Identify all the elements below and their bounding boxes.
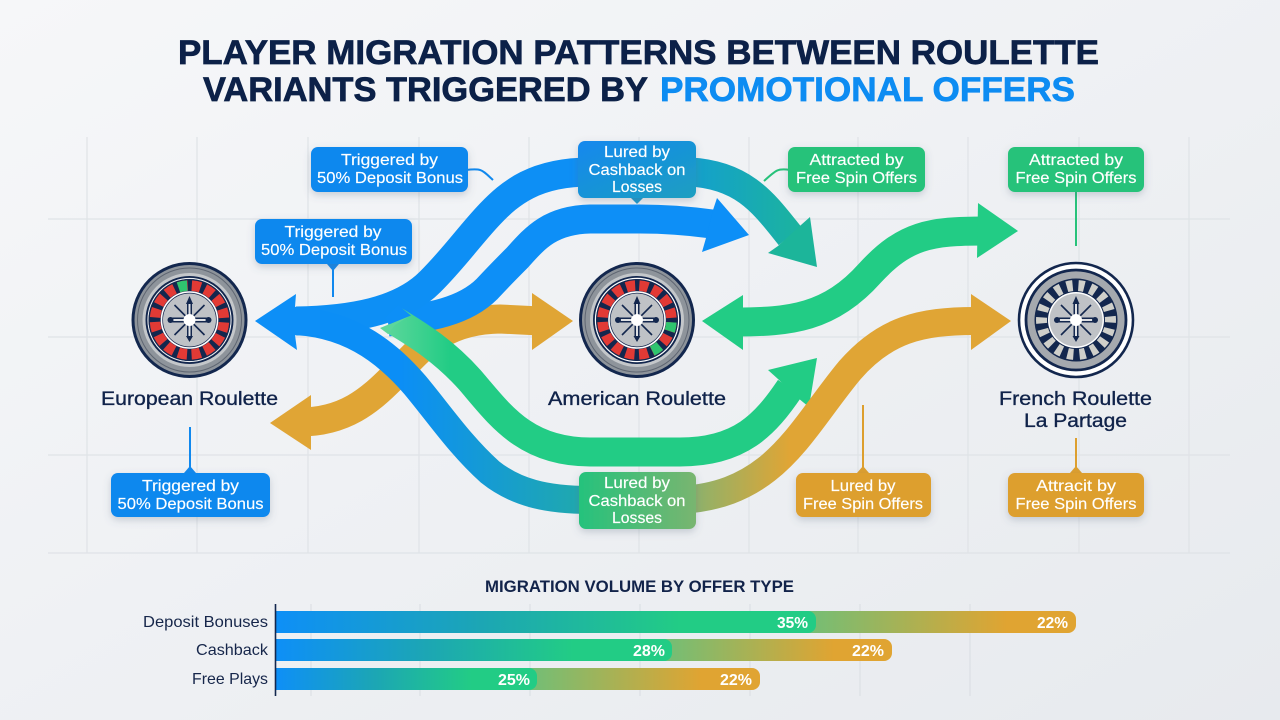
callout: lured free spin: Lured by bbox=[830, 478, 896, 495]
callout: deposit bonus near European: Triggered by bbox=[284, 224, 382, 241]
callout: lured free spin: Free Spin Offers bbox=[803, 496, 923, 513]
callout: free spin top middle: Attracted by bbox=[810, 152, 904, 169]
callout: deposit bonus near European: 50% Deposit Bonus bbox=[261, 242, 407, 259]
label: French Roulette La Partage: La Partage bbox=[1024, 410, 1127, 432]
arrow: green lower from European to French bbox=[380, 305, 817, 452]
callout: deposit bonus near European bbox=[255, 219, 412, 297]
bar: Deposit Bonuses: 35% bbox=[777, 615, 808, 632]
label: French Roulette La Partage bbox=[999, 388, 1152, 432]
callout: deposit bonus top: 50% Deposit Bonus bbox=[317, 170, 463, 187]
callout: free spin top right: Free Spin Offers bbox=[1016, 170, 1136, 187]
title: VARIANTS TRIGGERED BY bbox=[203, 71, 648, 109]
callout: deposit bonus bottom left bbox=[111, 427, 270, 517]
label: European Roulette: European Roulette bbox=[101, 388, 278, 410]
bar: Deposit Bonuses: Deposit Bonuses bbox=[143, 614, 268, 631]
bar: Free Plays: 22% bbox=[720, 672, 752, 689]
callout: cashback bottom bbox=[579, 472, 696, 529]
callout: cashback top: Lured by bbox=[604, 144, 670, 161]
callout: free spin top middle: Free Spin Offers bbox=[796, 170, 917, 187]
arrow: blue-teal from European over American to French bbox=[296, 172, 817, 321]
wheel: French Roulette bbox=[1019, 263, 1133, 377]
title: PROMOTIONAL OFFERS bbox=[660, 71, 1075, 109]
arrow: gold two-way between European and American bbox=[270, 293, 573, 450]
callout: deposit bonus top: Triggered by bbox=[341, 152, 438, 169]
arrow: European Roulette head bbox=[255, 294, 320, 350]
title: PLAYER MIGRATION PATTERNS BETWEEN ROULETTE bbox=[178, 34, 1099, 72]
callout: attracit free spin: Free Spin Offers bbox=[1016, 496, 1136, 513]
bar: Cashback bbox=[196, 639, 892, 661]
arrow: green from French to American bbox=[702, 203, 1018, 350]
callout: cashback bottom: Lured by bbox=[604, 475, 670, 492]
callout: deposit bonus top bbox=[311, 147, 493, 192]
bar: Cashback: 22% bbox=[852, 643, 884, 660]
callout: free spin top right bbox=[1008, 147, 1144, 246]
chart heading: MIGRATION VOLUME BY OFFER TYPE bbox=[485, 578, 794, 596]
callout: cashback top bbox=[578, 141, 696, 204]
callout: attracit free spin bbox=[1008, 438, 1144, 517]
arrow: blue to gold lower flow bbox=[285, 294, 1011, 500]
callout: cashback top: Losses bbox=[612, 179, 662, 196]
callout: cashback bottom: Cashback on bbox=[588, 493, 686, 510]
callout: free spin top middle bbox=[764, 147, 925, 192]
bar: Deposit Bonuses bbox=[143, 611, 1076, 633]
callout: attracit free spin: Attracit by bbox=[1036, 478, 1116, 495]
bar: Deposit Bonuses: 22% bbox=[1037, 615, 1068, 632]
bar: Cashback: Cashback bbox=[196, 642, 269, 659]
bar: Free Plays bbox=[192, 668, 760, 690]
wheel: European Roulette bbox=[133, 264, 246, 376]
label: French Roulette La Partage: French Roulette bbox=[999, 388, 1152, 410]
callout: lured free spin bbox=[796, 405, 931, 517]
bar: Free Plays: 25% bbox=[498, 672, 530, 689]
label: American Roulette: American Roulette bbox=[548, 388, 726, 410]
callout: cashback bottom: Losses bbox=[612, 510, 662, 527]
title bbox=[178, 34, 1099, 109]
bar: Cashback: 28% bbox=[633, 643, 665, 660]
wheel: American Roulette bbox=[580, 264, 694, 376]
arrow: blue to American Roulette bbox=[388, 198, 749, 322]
callout: cashback top: Cashback on bbox=[588, 162, 686, 179]
callout: free spin top right: Attracted by bbox=[1029, 152, 1123, 169]
callout: deposit bonus bottom left: 50% Deposit Bonus bbox=[118, 496, 264, 513]
callout: deposit bonus bottom left: Triggered by bbox=[142, 478, 239, 495]
bar: Free Plays: Free Plays bbox=[192, 671, 268, 688]
bar chart bbox=[143, 604, 1076, 696]
